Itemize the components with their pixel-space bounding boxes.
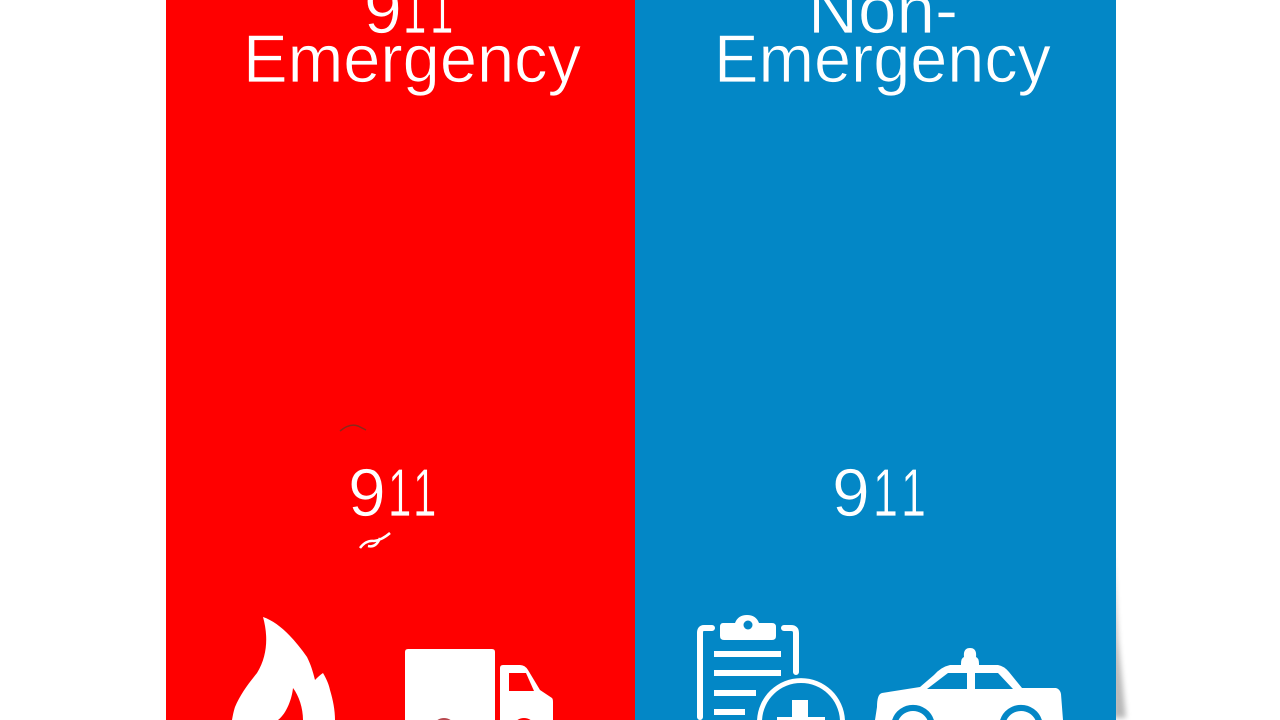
number: 911 <box>348 455 436 531</box>
mark: dark smudge <box>340 425 366 431</box>
heading: 911 Emergency: Emergency <box>243 21 581 97</box>
number: 911: 9 <box>348 455 386 531</box>
icon: flame <box>232 617 335 720</box>
icon: truck <box>405 649 553 720</box>
panel: non-emergency <box>635 0 1116 720</box>
icon: medical clipboard <box>700 615 845 720</box>
panel: 911 emergency <box>166 0 635 720</box>
number: 911: 1 <box>901 456 926 531</box>
heading: Non-Emergency: Emergency <box>714 21 1051 97</box>
number: 911: 1 <box>413 455 436 530</box>
icon: police car <box>875 648 1063 720</box>
mark: white squiggle <box>360 533 390 548</box>
number: 911: 9 <box>832 455 870 531</box>
number: 911: 1 <box>388 455 411 530</box>
number: 911 <box>832 455 926 531</box>
number: 911: 1 <box>873 456 898 531</box>
